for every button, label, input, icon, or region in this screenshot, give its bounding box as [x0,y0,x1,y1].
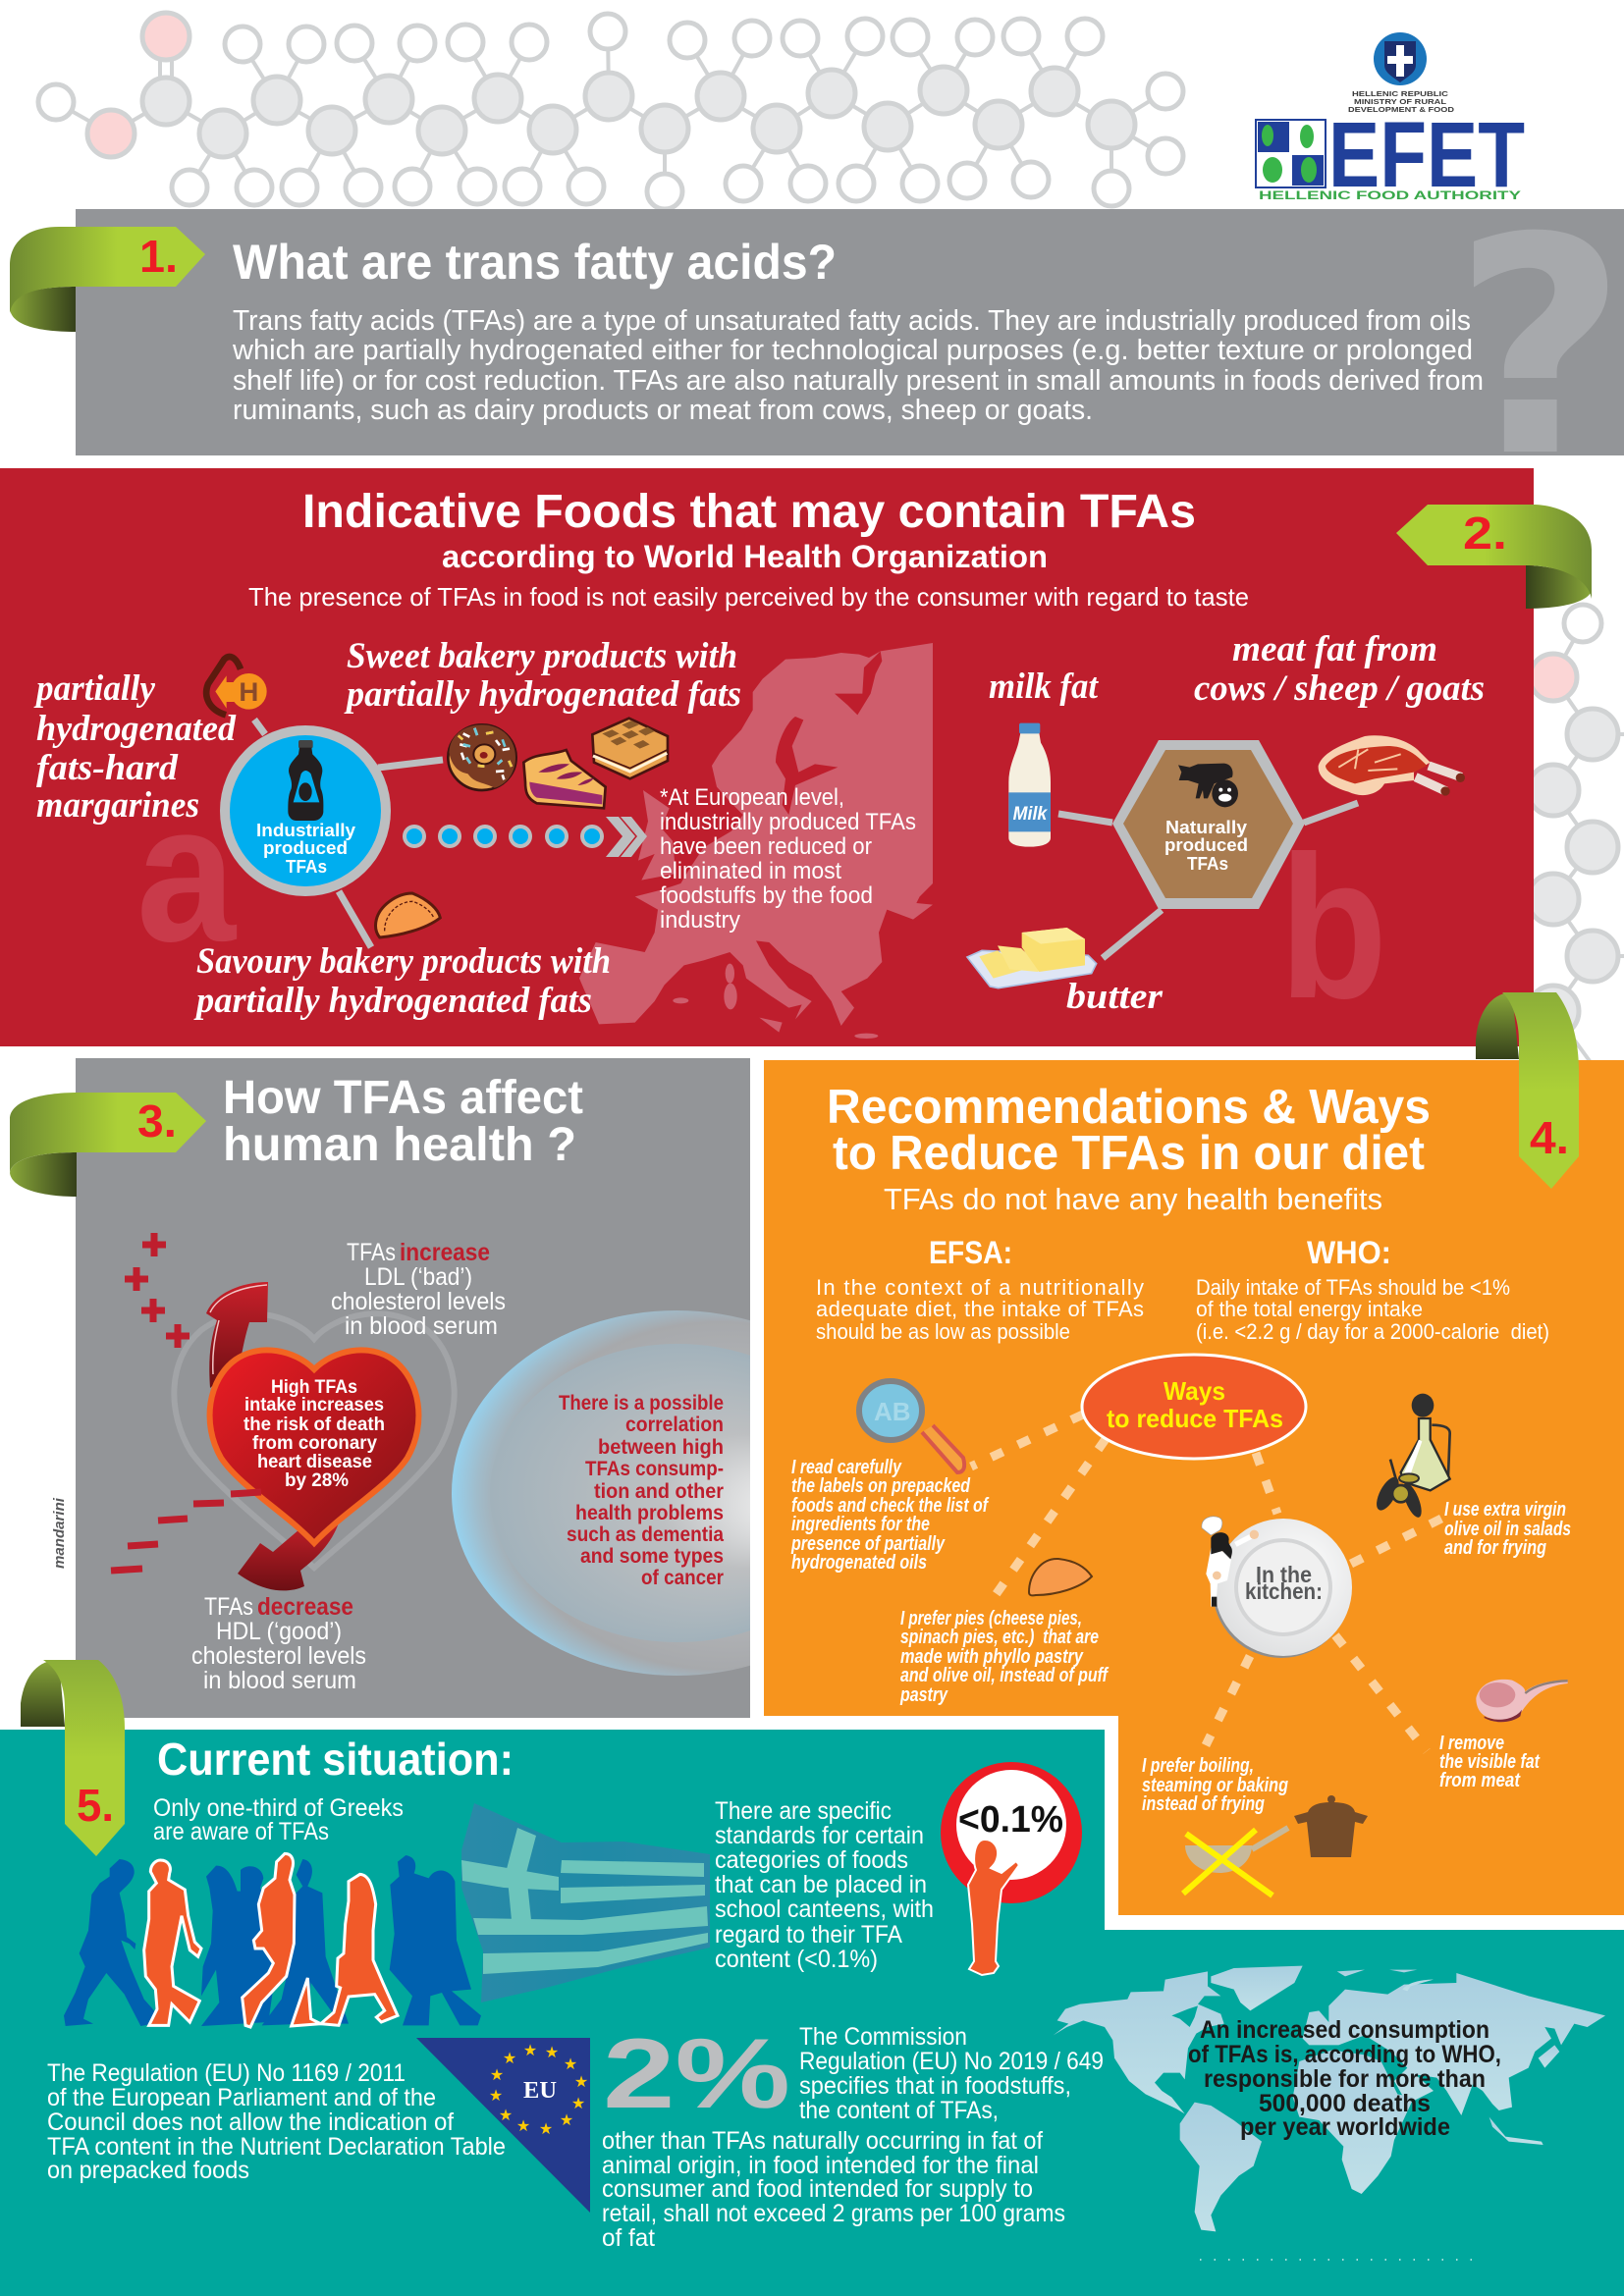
icon: olive oil bottle [1373,1394,1450,1520]
limit sign with child: <0.1% [958,1799,1063,1841]
logo: Hellenic Republic emblem and EFET [1256,32,1525,207]
European level note: foodstuffs by the food [660,882,873,909]
ghost heart outline [174,1313,455,1568]
regulation 1169 text: The Regulation (EU) No 1169 / 2011 [47,2059,406,2087]
label: savoury bakery products: partially hydrogenated fats [193,981,592,1021]
worldwide deaths text: An increased consumption [1200,2016,1489,2044]
increase LDL text: in blood serum [345,1312,498,1340]
industrially produced circle: Industrially [256,821,355,840]
EFSA text: should be as low as possible [816,1319,1070,1344]
ribbon 4: 4. [1530,1112,1569,1163]
label: savoury bakery products: Savoury bakery products with [196,941,611,982]
increase LDL text: TFAs [347,1239,396,1266]
school standards text: regard to their TFA [715,1921,902,1949]
industrially produced circle: TFAs [286,857,327,877]
logo: Hellenic Republic emblem and EFET: MINISTRY OF RURAL [1354,99,1447,106]
heart: by 28% [285,1470,349,1491]
tip: read labels: foods and check the list of [791,1495,990,1517]
taste note: The presence of TFAs in food is not easily perceived by the consumer with regard to taste [248,582,1249,612]
icon: donut [448,724,516,790]
regulation 2019/649 text: the content of TFAs, [799,2097,999,2124]
decrease HDL text: TFAs [204,1593,253,1621]
sphere with correlation note [452,1310,750,1676]
worldwide deaths text: 500,000 deaths [1259,2090,1431,2117]
tip: prefer boiling [1142,1755,1288,1815]
sphere with correlation note: There is a possible [559,1392,724,1415]
tip: prefer boiling: I prefer boiling, [1142,1755,1254,1777]
body text 1: Trans fatty acids (TFAs) are a type of unsaturated fatty acids. They are industrially produced from oils [233,305,1471,337]
heading 3: How TFAs affect [223,1072,583,1124]
regulation 2019/649 text: retail, shall not exceed 2 grams per 100 grams [602,2200,1065,2227]
regulation 2019/649 text: consumer and food intended for supply to [602,2175,1033,2203]
heart: the risk of death [244,1415,385,1435]
EU flag triangle: ★ [560,2112,573,2129]
ways to reduce TFAs ellipse [1082,1355,1306,1459]
heart [210,1350,418,1543]
label: meat fat: meat fat from [1232,629,1437,669]
EU flag triangle: ★ [564,2056,577,2073]
sphere with correlation note: health problems [575,1502,724,1524]
European level note: industrially produced TFAs [660,809,916,835]
question mark watermark: ? [1453,174,1624,522]
ribbon 2 [1396,505,1592,609]
sphere with correlation note: and some types [580,1545,724,1568]
naturally produced hexagon: produced [1164,835,1248,855]
regulation 1169 text [47,2059,506,2184]
worldwide deaths text: per year worldwide [1240,2113,1450,2141]
regulation 2019/649 text: The Commission [799,2023,967,2051]
European level note: eliminated in most [660,858,841,884]
icon: crossed-out frying pan [1183,1828,1288,1896]
one-third note [153,1794,404,1845]
WHO text: of the total energy intake [1196,1297,1423,1321]
EFSA text [816,1275,1144,1344]
icon: hydrogen atom: H [239,677,258,707]
ribbon 5 [21,1660,125,1856]
label: meat fat: cows / sheep / goats [1194,668,1485,709]
sphere with correlation note: of cancer [641,1567,724,1589]
icon: milk bottle: Milk [1013,804,1048,825]
ways to reduce TFAs ellipse: to reduce TFAs [1107,1404,1283,1433]
tip: prefer pies: spinach pies, etc.) that are [900,1627,1099,1648]
EU flag triangle: ★ [523,2043,537,2059]
regulation 1169 text: of the European Parliament and of the [47,2084,436,2111]
label: partially hydrogenated fats, hard margarines: margarines [36,785,199,826]
European level note: *At European level, [660,784,844,811]
regulation 2019/649 text: specifies that in foodstuffs, [799,2072,1071,2100]
EU flag triangle: ★ [503,2051,516,2067]
Europe map [579,643,933,1039]
label: partially hydrogenated fats, hard margarines [33,668,236,826]
tip: remove fat: I remove [1439,1733,1504,1754]
label: sweet bakery products: partially hydrogenated fats [344,674,741,715]
ribbon 3: 3. [137,1095,177,1147]
connector lines [254,720,1358,958]
increase LDL text [331,1239,506,1340]
icon: cow, sheep and goat [1178,764,1238,807]
heading 1: What are trans fatty acids? [233,235,837,290]
regulation 1169 text: Council does not allow the indication of [47,2109,454,2136]
one-third note: are aware of TFAs [153,1818,329,1845]
decrease HDL text: in blood serum [203,1667,356,1694]
regulation 2019/649 text [602,2023,1104,2252]
ribbon 1: 1. [139,231,178,282]
dashed connectors [971,1415,1441,1751]
body text 1 [232,305,1484,426]
school standards text [715,1797,934,1973]
in the kitchen plate: In the [1256,1562,1312,1587]
EU flag triangle: EU [523,2078,557,2104]
icon: magnifier [859,1381,964,1472]
panel 5: current situation [0,1660,1624,2296]
increase LDL text: cholesterol levels [331,1288,506,1315]
icon: lamb chop [1476,1680,1568,1722]
panel 1: what are trans fatty acids [10,174,1624,522]
label: meat fat [1194,629,1485,709]
decrease HDL text [191,1593,366,1694]
icon: chef [1202,1517,1259,1607]
tip: read labels: hydrogenated oils [791,1552,927,1574]
tip: remove fat: from meat [1439,1770,1521,1791]
icon: small pie [1029,1559,1092,1595]
school standards text: standards for certain [715,1822,924,1849]
WHO text: Daily intake of TFAs should be <1% [1196,1275,1510,1300]
logo: Hellenic Republic emblem and EFET: HELLENIC FOOD AUTHORITY [1259,188,1521,202]
industrially produced circle [220,725,391,896]
heading 4 [827,1081,1431,1180]
decrease HDL text: cholesterol levels [191,1642,366,1670]
panel 4: recommendations [764,992,1624,1915]
worldwide deaths text: responsible for more than [1204,2065,1486,2093]
dotted arrow [403,817,647,857]
ribbon 4 [1476,992,1579,1189]
sphere with correlation note: TFAs consump- [585,1458,724,1480]
icon: pie [523,750,606,808]
sphere with correlation note: such as dementia [567,1523,724,1546]
credit: mandarini: mandarini [51,1497,68,1569]
tip: olive oil: I use extra virgin [1444,1499,1566,1521]
Greek flag [461,1803,710,2002]
EU flag triangle [416,2038,590,2213]
label: sweet bakery products [344,636,741,715]
European level note: industry [660,907,740,934]
regulation 2019/649 text: of fat [602,2224,655,2252]
tip: read labels [790,1457,990,1574]
world map [1054,1966,1605,2231]
worldwide deaths text: of TFAs is, according to WHO, [1188,2041,1501,2068]
watermark letter b: b [1279,814,1387,1041]
school standards text: school canteens, with [715,1896,934,1923]
decrease HDL text: HDL (‘good’) [216,1618,342,1645]
subheading 2: according to World Health Organization [442,539,1048,574]
panel 3: how TFAs affect human health [10,1058,750,1718]
tip: remove fat: the visible fat [1439,1751,1541,1773]
icon: empanada [376,893,440,937]
sphere with correlation note: tion and other [594,1480,724,1503]
in the kitchen plate: kitchen: [1245,1578,1323,1604]
molecule background [38,13,1624,1065]
body text 1: ruminants, such as dairy products or meat from cows, sheep or goats. [233,395,1093,426]
European level note: have been reduced or [660,833,872,860]
tip: olive oil: olive oil in salads [1444,1519,1571,1540]
tip: prefer pies: pastry [899,1684,948,1706]
label: milk fat: milk fat [989,667,1100,707]
heading 3: human health ? [223,1119,576,1171]
EU flag triangle: ★ [499,2108,513,2124]
regulation 2019/649 text: Regulation (EU) No 2019 / 649 [799,2048,1104,2075]
icon: hydrogen atom [206,657,267,715]
sphere with correlation note: between high [598,1436,724,1459]
EFSA heading: EFSA: [929,1235,1012,1270]
school standards text: content (<0.1%) [715,1946,878,1973]
WHO text: (i.e. <2.2 g / day for a 2000-calorie diet) [1196,1319,1549,1344]
in the kitchen plate [1213,1519,1352,1658]
logo: Hellenic Republic emblem and EFET: DEVELOPMENT & FOOD [1348,107,1454,114]
plus signs [125,1233,189,1348]
school standards text: There are specific [715,1797,892,1825]
decrease HDL text: decrease [257,1593,353,1621]
tip: prefer pies: I prefer pies (cheese pies, [900,1608,1082,1629]
EU flag triangle: ★ [490,2067,504,2084]
icon: butter [967,928,1097,988]
panel 2: indicative foods [0,468,1592,1046]
silhouettes of people [64,1853,481,2027]
increase LDL text: LDL (‘bad’) [364,1263,472,1291]
tip: olive oil: and for frying [1444,1537,1546,1559]
EU flag triangle: ★ [516,2118,530,2135]
EU flag triangle: ★ [574,2074,588,2091]
tip: read labels: ingredients for the [791,1514,930,1535]
label: savoury bakery products [193,941,611,1021]
naturally produced hexagon [1112,740,1305,909]
tip: read labels: the labels on prepacked [791,1475,971,1497]
tip: remove fat [1439,1733,1541,1791]
2% figure: 2% [603,2019,790,2129]
icon: pot [1294,1795,1368,1857]
icon: meat [1319,735,1465,796]
regulation 2019/649 text: animal origin, in food intended for the final [602,2152,1039,2179]
regulation 1169 text: on prepacked foods [47,2157,249,2184]
tip: prefer boiling: steaming or baking [1142,1775,1288,1796]
body text 1: which are partially hydrogenated either for technological purposes (e.g. better texture or prolonged [232,335,1473,366]
label: partially hydrogenated fats, hard margarines: partially [33,668,156,709]
worldwide deaths text [1188,2016,1501,2141]
EU flag triangle: ★ [489,2088,503,2105]
EFSA text: adequate diet, the intake of TFAs [816,1297,1144,1321]
watermark letter a: a [136,764,238,983]
ribbon 1 [10,227,205,332]
heart: from coronary [252,1433,377,1454]
heading 3 [223,1072,583,1171]
school standards text: categories of foods [715,1846,908,1874]
body text 1: shelf life) or for cost reduction. TFAs are also naturally present in small amounts in foods derived from [233,365,1484,397]
logo: Hellenic Republic emblem and EFET: HELLENIC REPUBLIC [1352,91,1448,98]
one-third note: Only one-third of Greeks [153,1794,404,1822]
dotted line [1200,2259,1480,2261]
tip: prefer pies [899,1608,1110,1706]
WHO text [1196,1275,1549,1344]
ribbon 5: 5. [77,1780,114,1831]
tip: prefer pies: and olive oil, instead of puff [900,1665,1110,1686]
label: partially hydrogenated fats, hard margarines: fats-hard [36,748,178,788]
heading 2: Indicative Foods that may contain TFAs [302,486,1196,538]
heading 4: Recommendations & Ways [827,1081,1431,1134]
subheading 4: TFAs do not have any health benefits [884,1182,1382,1216]
tip: read labels: I read carefully [791,1457,902,1478]
EU flag triangle: ★ [539,2121,553,2138]
arrow up [206,1282,268,1388]
European level note [660,784,916,934]
EFSA text: In the context of a nutritionally [816,1275,1144,1300]
ribbon 3 [10,1093,206,1197]
sphere with correlation note: correlation [625,1414,724,1436]
naturally produced hexagon: TFAs [1187,854,1228,874]
icon: waffle cake [592,719,668,778]
school standards text: that can be placed in [715,1871,927,1898]
tip: prefer pies: made with phyllo pastry [900,1646,1084,1668]
regulation 1169 text: TFA content in the Nutrient Declaration Table [47,2133,506,2161]
regulation 2019/649 text: other than TFAs naturally occurring in fat of [602,2127,1043,2155]
arrow down [238,1517,341,1590]
increase LDL text: increase [400,1239,490,1266]
logo: Hellenic Republic emblem and EFET: EFET [1328,103,1525,207]
minus signs [111,1492,261,1571]
WHO heading: WHO: [1307,1235,1391,1270]
tip: prefer boiling: instead of frying [1142,1793,1265,1815]
ribbon 2: 2. [1463,507,1507,559]
heart: High TFAs [271,1377,357,1398]
icon: milk bottle [1008,723,1051,847]
industrially produced circle: produced [263,838,348,858]
naturally produced hexagon: Naturally [1165,818,1247,837]
label: partially hydrogenated fats, hard margarines: hydrogenated [36,709,236,749]
heart: intake increases [244,1395,384,1415]
tip: olive oil [1444,1499,1571,1559]
label: butter: butter [1066,977,1164,1017]
heading 4: to Reduce TFAs in our diet [833,1127,1425,1180]
EU flag triangle: ★ [571,2096,585,2112]
ways to reduce TFAs ellipse: Ways [1164,1376,1225,1406]
EU flag triangle: ★ [545,2045,559,2061]
heading 5: Current situation: [157,1734,514,1785]
icon: magnifier: AB [874,1397,911,1426]
label: sweet bakery products: Sweet bakery products with [347,636,737,676]
limit sign with child [941,1762,1082,1975]
heart: heart disease [257,1452,372,1472]
tip: read labels: presence of partially [790,1533,946,1555]
